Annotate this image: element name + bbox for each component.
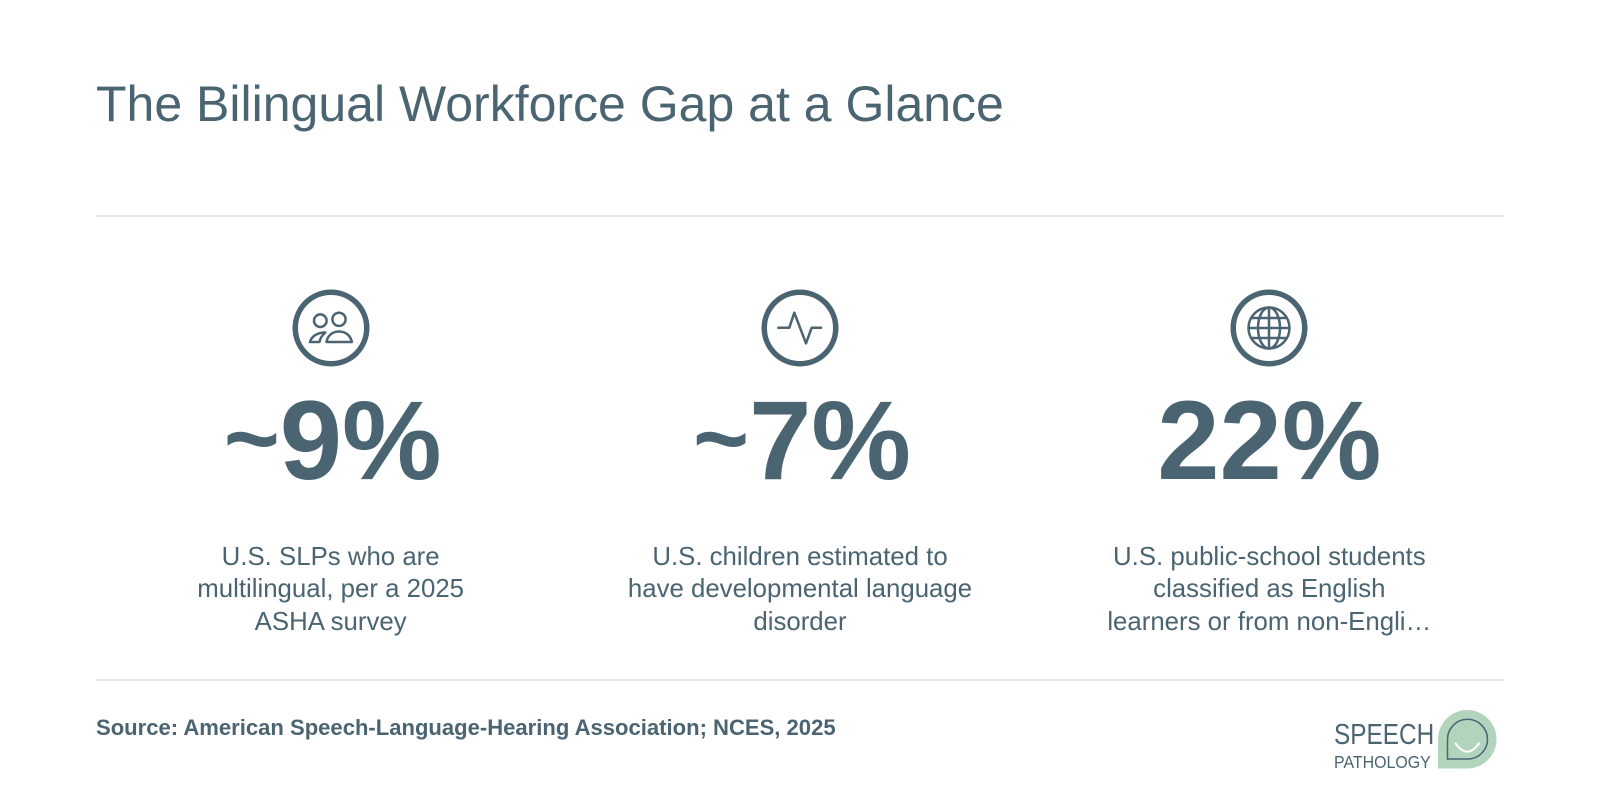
description: SLPs: ASHA survey xyxy=(255,608,407,636)
description: SLPs: multilingual, per a 2025 xyxy=(197,575,464,603)
description: children xyxy=(628,542,972,636)
logo: Speech Pathology xyxy=(1334,710,1496,772)
logo wordmark: speech: SPEECH xyxy=(1334,719,1434,751)
icon: globe xyxy=(1230,290,1308,366)
source note: Source: American Speech-Language-Hearing Association; NCES, 2025 xyxy=(96,715,836,740)
description: students: U.S. public-school students xyxy=(1113,542,1426,570)
logo mark: speech bubble xyxy=(1438,710,1496,768)
description: students: learners or from non-Engli… xyxy=(1107,608,1431,636)
description: children: disorder xyxy=(753,608,847,636)
description: students xyxy=(1107,542,1431,636)
icon: pulse xyxy=(762,290,838,366)
description: SLPs: U.S. SLPs who are xyxy=(222,542,440,570)
description: children: U.S. children estimated to xyxy=(652,542,948,570)
stat: ~9%: ~9% xyxy=(224,378,442,503)
icon: people xyxy=(292,290,370,366)
stat: ~7%: ~7% xyxy=(693,378,911,503)
description: children: have developmental language xyxy=(628,575,972,603)
description: SLPs xyxy=(197,542,464,636)
stat: 22%: 22% xyxy=(1157,378,1381,503)
description: students: classified as English xyxy=(1153,575,1385,603)
title: The Bilingual Workforce Gap at a Glance xyxy=(96,76,1004,132)
logo wordmark: pathology: PATHOLOGY xyxy=(1334,752,1430,772)
